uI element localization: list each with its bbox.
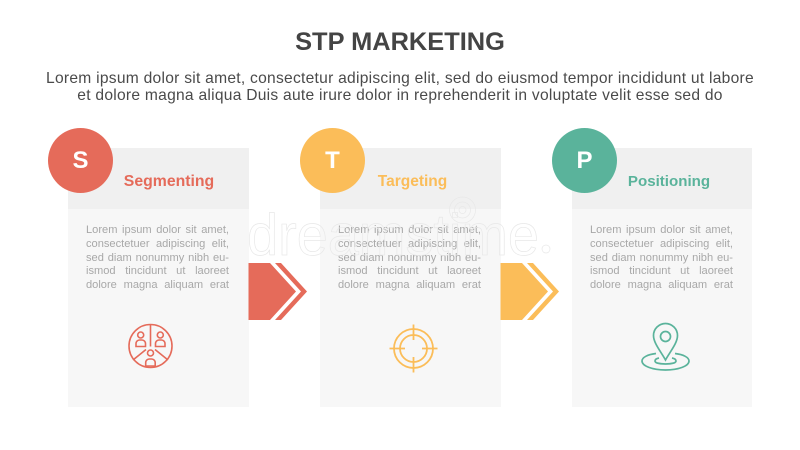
badge: P: P xyxy=(576,147,592,174)
text block: positioning: Lorem ipsum dolor sit amet, xyxy=(590,224,733,236)
heading: Targeting: Targeting xyxy=(378,173,447,190)
text block: positioning: ismod tincidunt ut laoreet xyxy=(590,265,733,277)
badge: S: S xyxy=(72,147,88,174)
panel: targeting xyxy=(320,148,500,407)
heading: Positioning: Positioning xyxy=(628,173,710,190)
subtitle text xyxy=(46,70,754,104)
text block: positioning: sed diam nonummy nibh eu- xyxy=(590,252,733,264)
text block: targeting xyxy=(338,224,481,291)
text block: positioning: dolore magna aliquam erat xyxy=(590,279,733,291)
text block: targeting: consectetuer adipiscing elit, xyxy=(338,238,481,250)
text block: segmenting: sed diam nonummy nibh eu- xyxy=(86,252,229,264)
heading: Segmenting: Segmenting xyxy=(124,173,214,190)
text block: positioning: consectetuer adipiscing elit, xyxy=(590,238,733,250)
text block: targeting: dolore magna aliquam erat xyxy=(338,279,481,291)
panel: positioning xyxy=(572,148,752,407)
text block: targeting: sed diam nonummy nibh eu- xyxy=(338,252,481,264)
text block: targeting: ismod tincidunt ut laoreet xyxy=(338,265,481,277)
icon: target crosshair xyxy=(390,324,438,372)
text block: segmenting: Lorem ipsum dolor sit amet, xyxy=(86,224,229,236)
icon: segmented people xyxy=(129,324,172,368)
badge: T xyxy=(300,128,365,193)
text block: segmenting: dolore magna aliquam erat xyxy=(86,279,229,291)
arrow: targeting to positioning xyxy=(500,263,559,320)
panel: segmenting xyxy=(68,148,248,407)
text block: targeting: Lorem ipsum dolor sit amet, xyxy=(338,224,481,236)
badge: T: T xyxy=(325,147,340,174)
subtitle text: Lorem ipsum dolor sit amet, consectetur adipiscing elit, sed do eiusmod tempor incididunt ut labore xyxy=(46,70,754,86)
text block: segmenting: consectetuer adipiscing elit, xyxy=(86,238,229,250)
badge: P xyxy=(552,128,617,193)
subtitle text: et dolore magna aliqua Duis aute irure dolor in reprehenderit in voluptate velit esse sed do xyxy=(77,87,723,104)
text block: segmenting xyxy=(86,224,229,291)
icon: location pin xyxy=(642,324,689,370)
text block: segmenting: ismod tincidunt ut laoreet xyxy=(86,265,229,277)
watermark: dreamstime xyxy=(247,203,539,268)
text block: positioning xyxy=(590,224,733,291)
title: STP MARKETING xyxy=(295,28,505,56)
arrow: segmenting to targeting xyxy=(248,263,307,320)
badge: S xyxy=(48,128,113,193)
